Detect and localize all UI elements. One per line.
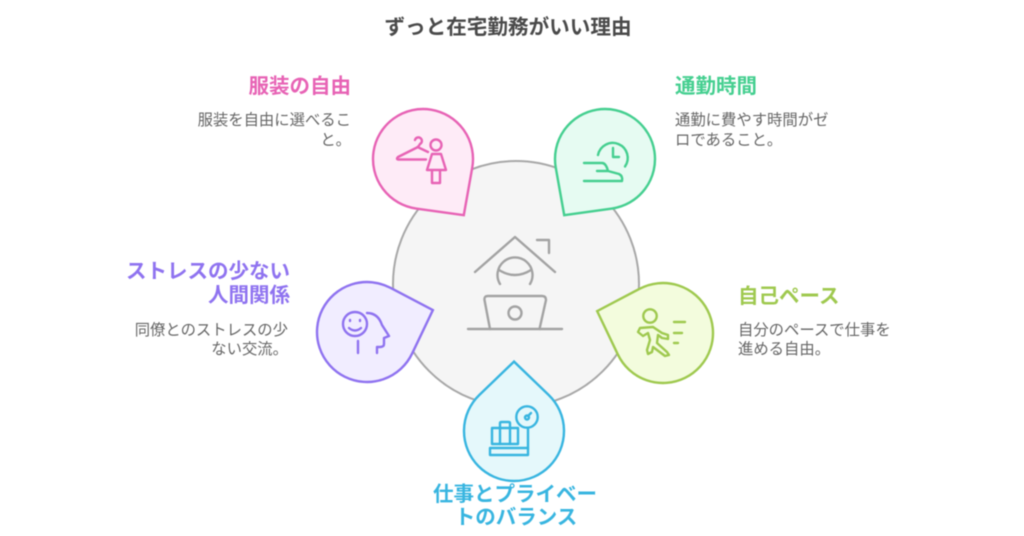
panel: clothing freedom [198,75,504,245]
icon: clock and shoe [584,143,628,181]
heading: clothing: 服装の自由 [248,75,351,98]
text: commute: 通勤に費やす時間がゼ [675,111,828,129]
purple drop [304,263,449,395]
pink drop [353,89,504,245]
text: stress: ない交流。 [211,340,288,358]
icon: suitcase on scale [490,406,538,455]
heading: balance: 仕事とプライベー [433,483,597,506]
heading: pace: 自己ペース [738,285,839,308]
icon: runner [638,309,685,356]
icon: smiling face and head [343,312,389,353]
text: commute: ロであること。 [675,132,782,149]
heading: commute: 通勤時間 [675,75,757,98]
icon: hanger and person [397,137,446,183]
green drop [524,89,675,245]
heading: balance: トのバランス [455,506,577,529]
text: pace: 自分のペースで仕事を [738,321,891,339]
blue drop [464,362,564,481]
icon: home office worker [468,237,562,329]
panel: work-life balance [433,362,597,529]
central circle [393,161,639,407]
heading: stress: ストレスの少ない [126,260,290,283]
panel: commute time [524,75,828,245]
title: ずっと在宅勤務がいい理由 [384,15,632,39]
lime drop [581,264,726,396]
panel: own pace [581,264,891,396]
panel: less stress [126,260,449,395]
text: clothing: 服装を自由に選べるこ [198,111,351,129]
text: stress: 同僚とのストレスの少 [135,321,288,339]
text: clothing: と。 [320,132,351,149]
text: pace: 進める自由。 [738,340,830,358]
heading: stress: 人間関係 [208,284,290,307]
